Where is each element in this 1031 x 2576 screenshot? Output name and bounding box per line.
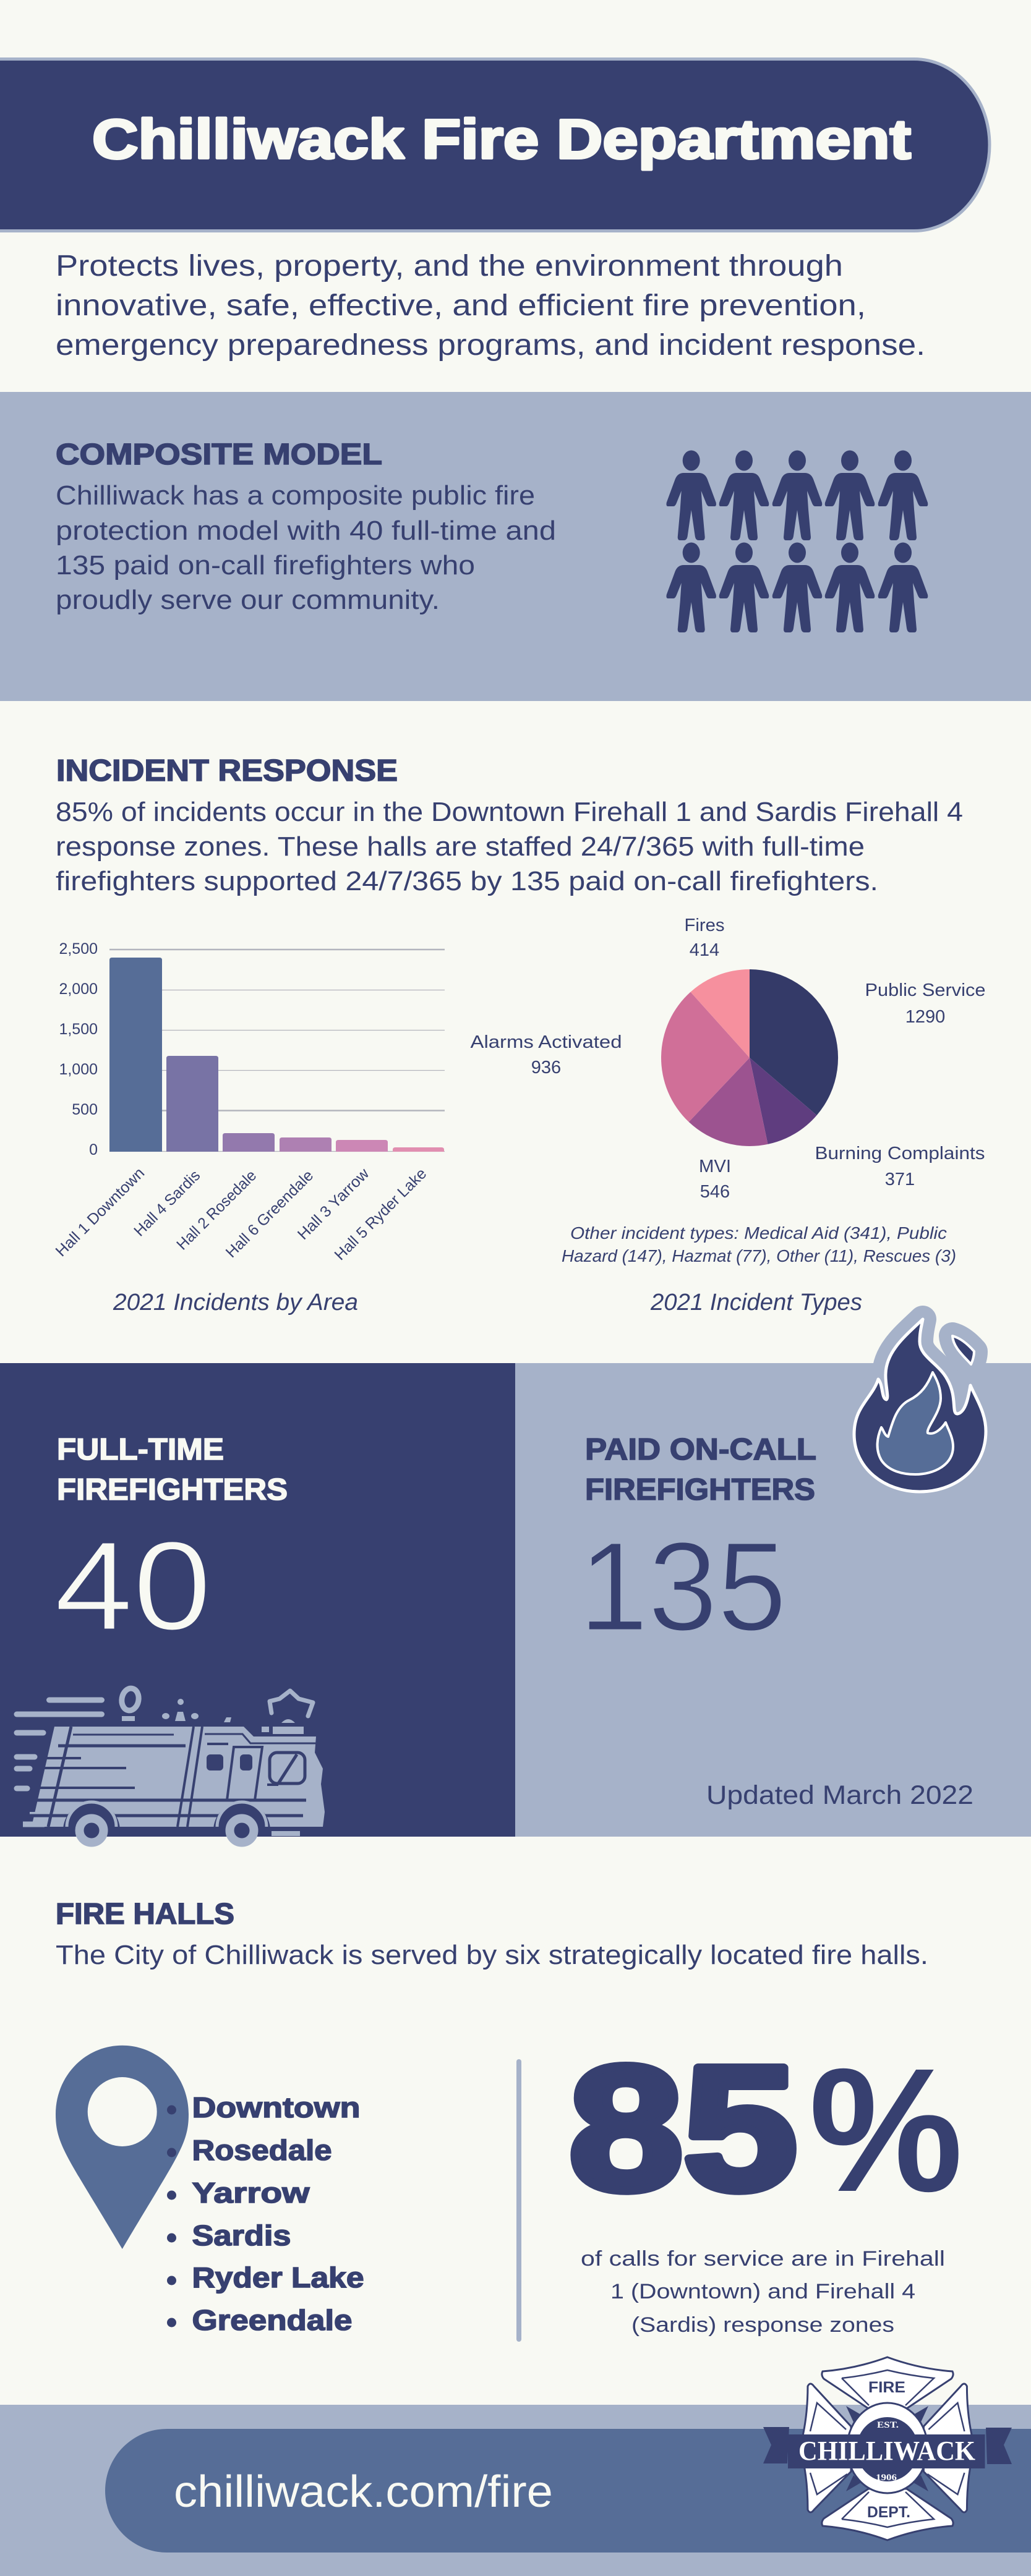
stat description: 1 (Downtown) and Firehall 4 bbox=[610, 2280, 915, 2303]
composite model text: protection model with 40 full-time and bbox=[56, 516, 556, 546]
heading: paid on-call firefighters bbox=[585, 1433, 816, 1507]
composite model text: Chilliwack has a composite public fire bbox=[56, 480, 535, 511]
logo: fire department badge: EST. bbox=[877, 2420, 899, 2430]
heading: paid on-call firefighters: PAID ON-CALL bbox=[585, 1433, 816, 1466]
fire halls text: The City of Chilliwack is served by six strategically located fire halls. bbox=[56, 1940, 928, 1970]
pie chart: 2021 incident types bbox=[470, 916, 986, 1202]
logo: fire department badge: FIRE bbox=[868, 2379, 905, 2396]
footer band bbox=[0, 2405, 1031, 2576]
logo: fire department badge: 1906 bbox=[876, 2473, 897, 2483]
icon: flame bbox=[854, 1319, 986, 1492]
incident response text: response zones. These halls are staffed 24/7/365 with full-time bbox=[56, 831, 865, 862]
bars bbox=[109, 958, 444, 1152]
pie labels: 546 bbox=[700, 1182, 730, 1202]
pie labels: Burning Complaints bbox=[815, 1144, 985, 1163]
logo: fire department badge: CHILLIWACK bbox=[798, 2436, 975, 2466]
updated note: Updated March 2022 bbox=[706, 1780, 973, 1810]
pie labels: 371 bbox=[885, 1170, 915, 1189]
pie labels bbox=[470, 916, 986, 1202]
stat description: of calls for service are in Firehall bbox=[581, 2247, 945, 2271]
stat: 85% bbox=[569, 2030, 963, 2229]
composite model text: proudly serve our community. bbox=[56, 585, 440, 615]
icon: fire truck bbox=[14, 1687, 325, 1859]
icon: ten people bbox=[666, 450, 928, 632]
heading: full-time firefighters bbox=[57, 1433, 288, 1507]
y axis labels bbox=[59, 940, 98, 1158]
list: fire halls: Sardis bbox=[192, 2219, 291, 2251]
pie labels: Alarms Activated bbox=[470, 1032, 622, 1052]
heading: paid on-call firefighters: FIREFIGHTERS bbox=[585, 1473, 815, 1507]
pie labels: Public Service bbox=[865, 980, 986, 1000]
divider bbox=[516, 2059, 521, 2342]
heading: fire halls: FIRE HALLS bbox=[56, 1898, 234, 1931]
intro text: emergency preparedness programs, and incident response. bbox=[56, 329, 925, 362]
stat description: (Sardis) response zones bbox=[631, 2313, 894, 2337]
x axis labels: Hall 4 Sardis bbox=[130, 1167, 203, 1240]
caption: 2021 incidents by area: 2021 Incidents by Area bbox=[113, 1290, 358, 1316]
heading: full-time firefighters: FIREFIGHTERS bbox=[57, 1473, 288, 1507]
list: fire halls: Greendale bbox=[192, 2304, 353, 2336]
number: 40: 40 bbox=[54, 1515, 212, 1657]
intro text: Protects lives, property, and the environment through bbox=[56, 250, 843, 283]
note: other incident types: Other incident types: Medical Aid (341), Public bbox=[570, 1223, 947, 1243]
y axis labels: 1,500 bbox=[59, 1021, 98, 1038]
incident response text bbox=[56, 797, 963, 896]
y axis labels: 2,500 bbox=[59, 940, 98, 958]
y axis labels: 500 bbox=[72, 1101, 98, 1118]
title: Chilliwack Fire Department bbox=[92, 109, 911, 171]
list: fire halls: Downtown bbox=[192, 2091, 360, 2123]
pie labels: 936 bbox=[531, 1058, 561, 1078]
incident response text: firefighters supported 24/7/365 by 135 paid on-call firefighters. bbox=[56, 866, 878, 896]
list: fire halls: Ryder Lake bbox=[192, 2261, 364, 2293]
pie labels: 414 bbox=[690, 940, 719, 960]
list: fire halls: Rosedale bbox=[192, 2134, 332, 2166]
list: fire halls bbox=[167, 2091, 364, 2336]
stat: 85%: 85 bbox=[569, 2030, 797, 2227]
stat: 85%: % bbox=[809, 2032, 963, 2229]
note: other incident types: Hazard (147), Hazmat (77), Other (11), Rescues (3) bbox=[562, 1246, 956, 1265]
y axis labels: 2,000 bbox=[59, 980, 98, 998]
pie labels: 1290 bbox=[905, 1007, 945, 1027]
intro text bbox=[56, 250, 925, 362]
y axis labels: 1,000 bbox=[59, 1061, 98, 1078]
heading: full-time firefighters: FULL-TIME bbox=[57, 1433, 224, 1466]
website url: chilliwack.com/fire bbox=[174, 2467, 553, 2517]
list: fire halls: Yarrow bbox=[192, 2177, 310, 2209]
x axis labels: Hall 3 Yarrow bbox=[294, 1165, 373, 1243]
stat description bbox=[581, 2247, 945, 2337]
bar chart: 2021 incidents by area bbox=[52, 940, 445, 1264]
caption: 2021 incident types: 2021 Incident Types bbox=[650, 1290, 862, 1316]
y axis labels: 0 bbox=[89, 1141, 98, 1158]
x axis labels bbox=[52, 1164, 430, 1264]
incident response text: 85% of incidents occur in the Downtown Firehall 1 and Sardis Firehall 4 bbox=[56, 797, 963, 827]
composite model text bbox=[56, 480, 556, 615]
title banner bbox=[0, 59, 990, 231]
x axis labels: Hall 1 Downtown bbox=[52, 1164, 148, 1260]
pie labels: Fires bbox=[684, 916, 725, 935]
heading: composite model: COMPOSITE MODEL bbox=[56, 438, 382, 471]
heading: incident response: INCIDENT RESPONSE bbox=[56, 754, 398, 788]
composite model text: 135 paid on-call firefighters who bbox=[56, 550, 475, 580]
panel: full-time firefighters bbox=[0, 1363, 515, 1859]
x axis labels: Hall 6 Greendale bbox=[223, 1167, 317, 1261]
x axis labels: Hall 2 Rosedale bbox=[173, 1167, 260, 1253]
intro text: innovative, safe, effective, and efficient fire prevention, bbox=[56, 289, 866, 322]
pie labels: MVI bbox=[699, 1157, 731, 1176]
x axis labels: Hall 5 Ryder Lake bbox=[331, 1165, 430, 1264]
icon: map pin bbox=[56, 2046, 189, 2249]
logo: fire department badge bbox=[763, 2357, 1012, 2540]
number: 135: 135 bbox=[579, 1516, 787, 1657]
panel: composite model bbox=[0, 392, 1031, 701]
logo: fire department badge: DEPT. bbox=[867, 2504, 910, 2521]
note: other incident types bbox=[562, 1223, 956, 1265]
panel: paid on-call firefighters bbox=[515, 1363, 1031, 1837]
